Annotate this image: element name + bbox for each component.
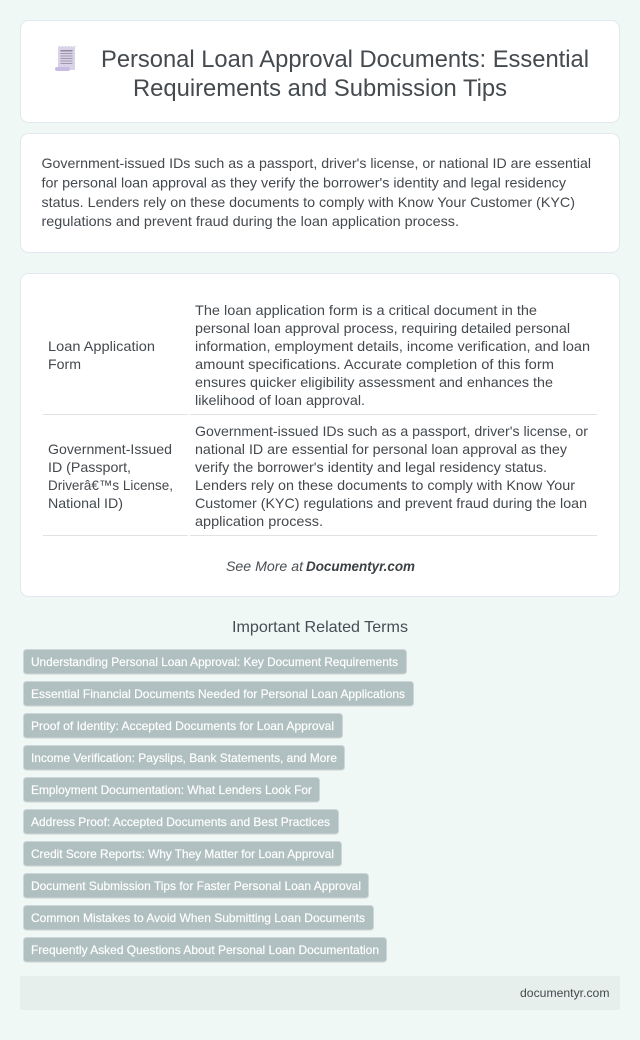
row description: loan application form: personal loan approval process, requiring detailed personal [195,320,570,336]
chip: credit score reports: Credit Score Reports: Why They Matter for Loan Approval [31,847,334,861]
row label: government-issued id [48,441,173,511]
panel: summary [20,134,620,252]
row description: government-issued id: Government-issued IDs such as a passport, driver's license, or [195,423,588,439]
see more link [226,558,415,574]
chip: essential financial documents [24,682,414,706]
panel: document table [20,274,620,596]
chip: document submission tips [24,874,368,898]
icon: document scroll [55,46,76,71]
row label: loan application form: Form [48,356,81,372]
chip: essential financial documents: Essential Financial Documents Needed for Personal Loan Applications [31,687,405,701]
row description: loan application form: information, employment details, income verification, and loan [195,338,590,354]
chip: proof of identity: Proof of Identity: Accepted Documents for Loan Approval [31,719,334,733]
chip: income verification [24,746,344,770]
table row: government-issued id [43,423,597,536]
summary text block: Government-issued IDs such as a passport, driver's license, or national ID are essential [42,155,591,171]
see more link: Documentyr.com [306,558,415,574]
summary text block [42,155,591,229]
row label: government-issued id: National ID) [48,495,123,511]
row description: government-issued id: Lenders rely on these documents to comply with Know Your [195,477,575,493]
row description: government-issued id [195,423,588,529]
summary text block: for personal loan approval as they verify the borrower's identity and legal residency [42,174,566,190]
chip: frequently asked questions: Frequently Asked Questions About Personal Loan Documentation [31,943,379,957]
summary text block: status. Lenders rely on these documents to comply with Know Your Customer (KYC) [42,194,575,210]
chip: income verification: Income Verification: Payslips, Bank Statements, and More [31,751,337,765]
row label: government-issued id: Driverâ€™s License, [48,477,173,493]
row label: government-issued id: ID (Passport, [48,459,131,475]
row description: government-issued id: Customer (KYC) regulations and prevent fraud during the loan [195,495,587,511]
row label: loan application form [48,338,155,372]
table row: loan application form [43,302,597,415]
heading: important related terms: Important Related Terms [232,619,408,636]
title: Personal Loan Approval Documents: Essential [101,46,589,73]
row description: loan application form [195,302,590,408]
title [101,46,589,102]
row description: loan application form: ensures quicker eligibility assessment and enhances the [195,374,553,390]
chip: frequently asked questions [24,938,386,962]
footer [20,976,620,1010]
chip: address proof: Address Proof: Accepted Documents and Best Practices [31,815,330,829]
row label: government-issued id: Government-Issued [48,441,172,457]
chip: employment documentation [24,778,320,802]
row description: government-issued id: application process. [195,513,323,529]
row description: government-issued id: national ID are essential for personal loan approval as they [195,441,567,457]
related terms list [24,650,414,962]
see more link: See More at [226,558,304,574]
chip: address proof [24,810,338,834]
footer: documentyr.com [520,986,610,1000]
row description: loan application form: amount specifications. Accurate completion of this form [195,356,554,372]
chip: common mistakes: Common Mistakes to Avoid When Submitting Loan Documents [31,911,365,925]
chip: document submission tips: Document Submission Tips for Faster Personal Loan Approval [31,879,361,893]
panel: header [20,20,620,122]
summary text block: regulations and prevent fraud during the loan application process. [42,213,459,229]
row description: loan application form: The loan application form is a critical document in the [195,302,537,318]
chip: key document requirements: Understanding Personal Loan Approval: Key Document Requirements [31,655,398,669]
row label: loan application form: Loan Application [48,338,155,354]
title: Requirements and Submission Tips [133,75,507,102]
chip: credit score reports [24,842,342,866]
chip: key document requirements [24,650,406,674]
row description: government-issued id: verify the borrower's identity and legal residency status. [195,459,547,475]
chip: proof of identity [24,714,342,738]
row description: loan application form: likelihood of loan approval. [195,392,365,408]
chip: employment documentation: Employment Documentation: What Lenders Look For [31,783,312,797]
chip: common mistakes [24,906,374,930]
